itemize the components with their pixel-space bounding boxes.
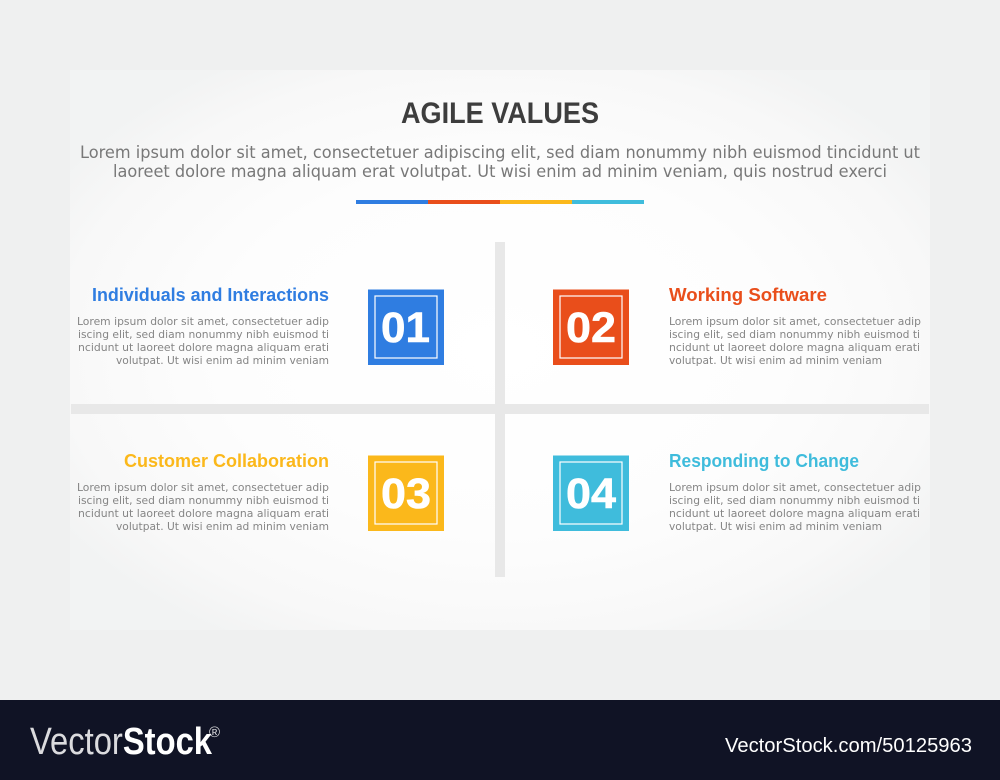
body text 02: ncidunt ut laoreet dolore magna aliquam erati [669, 342, 920, 354]
colour divider [356, 200, 644, 204]
number badge 03 [368, 456, 444, 531]
body text 02: iscing elit, sed diam nonummy nibh euismod ti [669, 329, 920, 341]
body text 02: volutpat. Ut wisi enim ad minim veniam [669, 355, 882, 367]
intro text: Lorem ipsum dolor sit amet, consectetuer adipiscing elit, sed diam nonummy nibh euismod tincidunt ut [80, 143, 921, 162]
body text 03: ncidunt ut laoreet dolore magna aliquam erati [78, 508, 329, 520]
body text 02 [669, 316, 921, 367]
heading 02: Working Software [669, 285, 827, 305]
number badge 01 [368, 290, 444, 365]
footer image id: VectorStock.com/50125963 [725, 735, 972, 757]
body text 02: Lorem ipsum dolor sit amet, consectetuer adip [669, 316, 921, 328]
body text 04: volutpat. Ut wisi enim ad minim veniam [669, 521, 882, 533]
central glow panel [70, 70, 930, 630]
item 02: Working Software [553, 285, 921, 367]
registered mark: ® [209, 724, 220, 741]
number badge 02: 02 [566, 304, 616, 352]
intro text [80, 143, 921, 181]
heading 03: Customer Collaboration [124, 451, 329, 471]
body text 04: iscing elit, sed diam nonummy nibh euismod ti [669, 495, 920, 507]
body text 03 [77, 482, 329, 533]
body text 03: iscing elit, sed diam nonummy nibh euismod ti [78, 495, 329, 507]
quadrant cross [71, 242, 929, 577]
item 01: Individuals and Interactions [77, 285, 444, 367]
body text 03: volutpat. Ut wisi enim ad minim veniam [116, 521, 329, 533]
heading 04: Responding to Change [669, 451, 859, 471]
body text 01: ncidunt ut laoreet dolore magna aliquam erati [78, 342, 329, 354]
body text 01: Lorem ipsum dolor sit amet, consectetuer adip [77, 316, 329, 328]
body text 01 [77, 316, 329, 367]
title: AGILE VALUES [401, 97, 599, 130]
item 04: Responding to Change [553, 451, 921, 533]
intro text: laoreet dolore magna aliquam erat volutpat. Ut wisi enim ad minim veniam, quis nostrud exerci [113, 162, 887, 181]
body text 03: Lorem ipsum dolor sit amet, consectetuer adip [77, 482, 329, 494]
number badge 04: 04 [566, 470, 616, 518]
body text 01: iscing elit, sed diam nonummy nibh euismod ti [78, 329, 329, 341]
number badge 01: 01 [381, 304, 430, 352]
footer bar [0, 700, 1000, 780]
body text 04: ncidunt ut laoreet dolore magna aliquam erati [669, 508, 920, 520]
number badge 03: 03 [381, 470, 431, 518]
body text 04: Lorem ipsum dolor sit amet, consectetuer adip [669, 482, 921, 494]
heading 01: Individuals and Interactions [92, 285, 329, 305]
item 03: Customer Collaboration [77, 451, 444, 533]
body text 01: volutpat. Ut wisi enim ad minim veniam [116, 355, 329, 367]
number badge 02 [553, 290, 629, 365]
body text 04 [669, 482, 921, 533]
number badge 04 [553, 456, 629, 531]
footer logo: VectorStock [30, 721, 213, 763]
